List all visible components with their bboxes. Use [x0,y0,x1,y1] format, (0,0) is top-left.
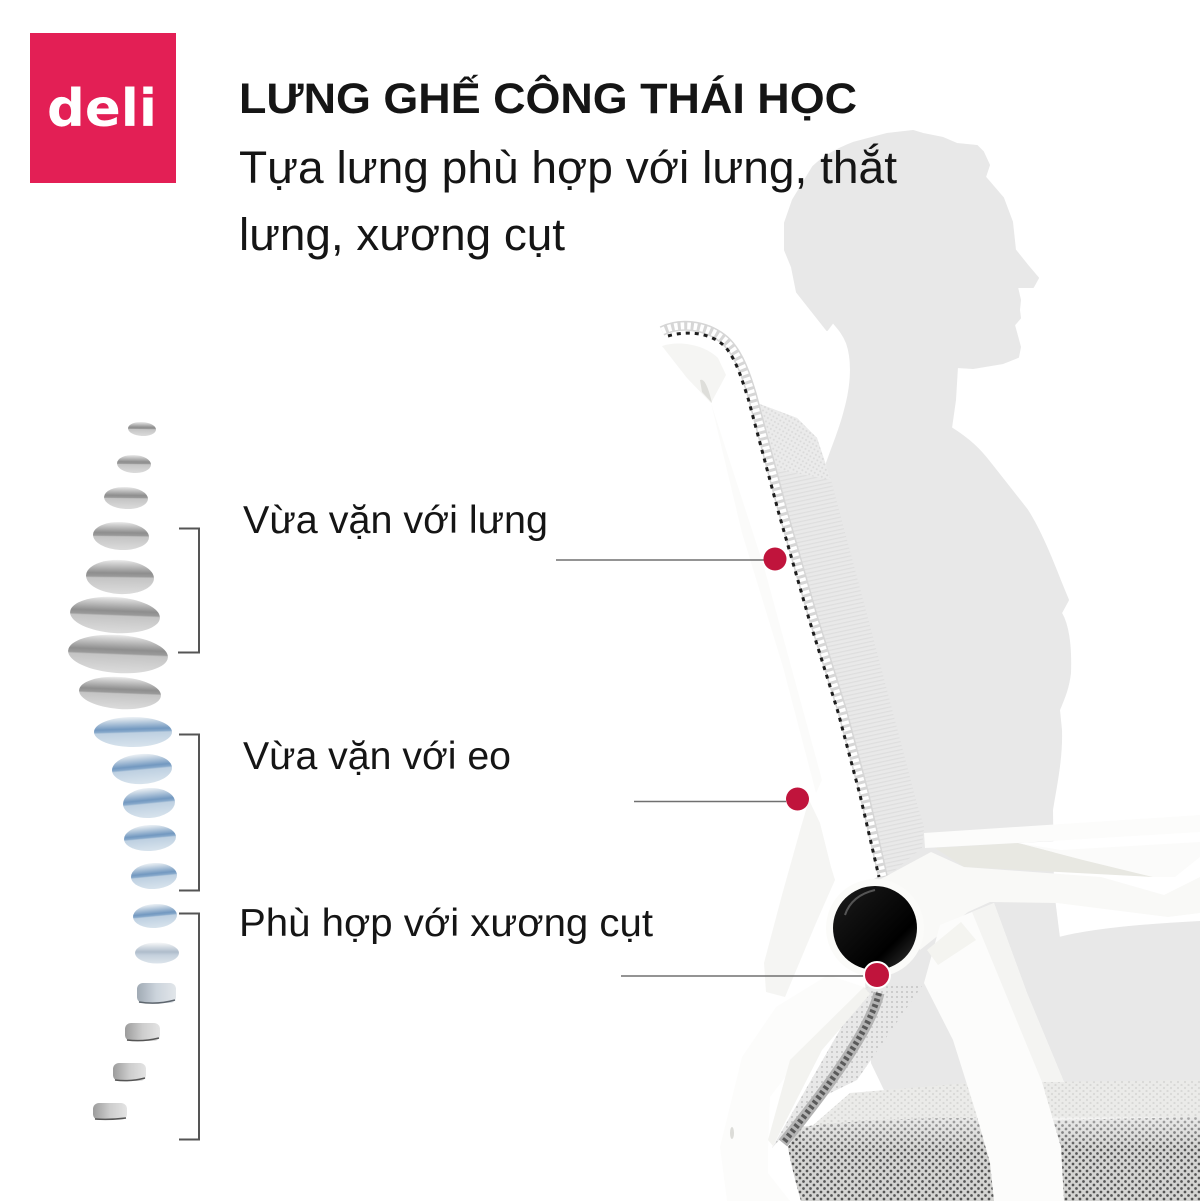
subheading: lưng, xương cụt [239,209,566,260]
bracket: back [178,528,199,652]
spine vertebrae [67,421,179,1120]
adjustment button [927,922,976,965]
arm support [879,852,1200,950]
callout: tailbone marker [621,962,890,988]
lumbar vertebrae [94,717,178,929]
seat cushion [788,1080,1200,1201]
logo: deli [30,33,176,183]
backrest frame [660,328,880,905]
callout: back marker [556,548,786,570]
front leg [924,903,1064,1201]
subheading: Tựa lưng phù hợp với lưng, thắt [239,142,898,193]
bracket: waist [179,734,199,890]
backrest mesh edge rope [662,326,883,877]
heading: LƯNG GHẾ CÔNG THÁI HỌC [239,74,857,123]
subheading [239,142,898,260]
label: tailbone: Phù hợp với xương cụt [239,902,653,945]
silhouette: seated person [785,131,1200,1090]
label: waist: Vừa vặn với eo [243,735,511,778]
callout: waist marker [634,788,809,810]
label: back: Vừa vặn với lưng [243,499,548,542]
lower back mesh [772,983,924,1148]
upper back mesh panel [757,403,924,880]
black knob [826,879,924,977]
lower mesh edge [783,993,879,1143]
armrest [924,815,1200,877]
chair [660,326,1200,1201]
bracket: tailbone [179,914,199,1140]
thoracic vertebrae [67,421,169,712]
lumbar pad [764,800,835,997]
logo: deli: deli [47,79,157,139]
lower frame [720,975,870,1201]
sacral vertebrae [93,942,179,1120]
